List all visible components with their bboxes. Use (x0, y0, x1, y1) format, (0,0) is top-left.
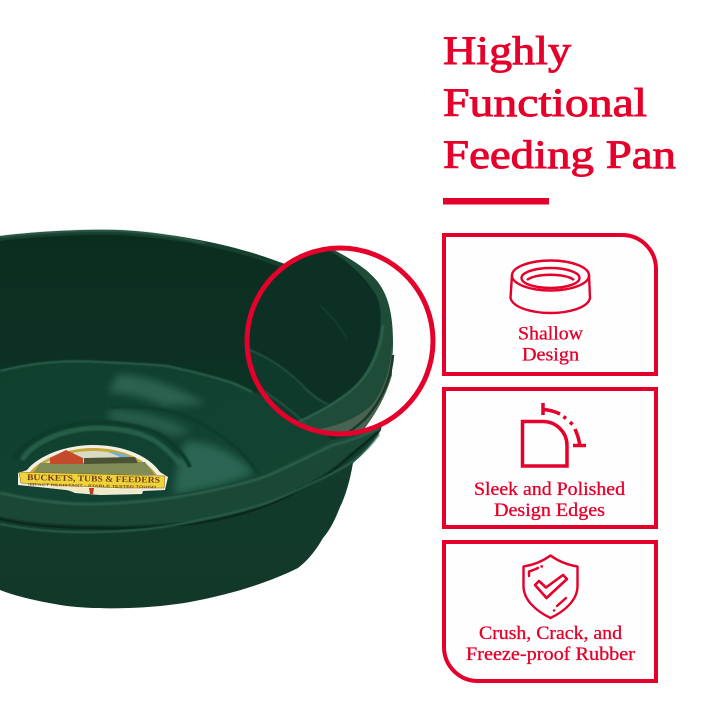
sticker banner text: BUCKETS, TUBS & FEEDERS (27, 472, 160, 485)
check mark (535, 575, 567, 598)
shield inner glint bottom (554, 598, 566, 610)
floor ridge highlight (0, 361, 252, 392)
label line 1: Shallow (518, 324, 583, 344)
label: sleek edges (474, 479, 626, 521)
title line 3: Feeding Pan (443, 132, 676, 177)
sticker dome (29, 448, 157, 475)
sticker trees (84, 457, 138, 464)
lens red ring (247, 248, 433, 434)
magnified floor (250, 352, 326, 420)
sticker label (18, 445, 168, 495)
magnified lower ridge (264, 390, 307, 425)
panel border (444, 389, 656, 527)
label line 1: Crush, Crack, and (479, 623, 623, 644)
panel: sleek edges (444, 389, 656, 527)
panel: shallow design (444, 235, 656, 374)
label line 1: Sleek and Polished (474, 479, 626, 500)
pan outer body (0, 230, 392, 608)
arc end cap top (541, 403, 545, 415)
magnified outer rim (298, 250, 393, 429)
sticker banner (19, 472, 165, 488)
title line 2: Functional (443, 80, 647, 125)
center well ridge (14, 422, 190, 467)
lens contents (250, 250, 394, 432)
floor sheen band 1 (108, 374, 206, 406)
magnified wall crease (320, 305, 347, 340)
title line 1: Highly (443, 28, 571, 73)
callout circle: magnified rim (240, 240, 433, 445)
label: crush proof (466, 623, 636, 665)
sticker sky (36, 451, 151, 472)
pan floor (0, 362, 333, 501)
shield outline (524, 556, 578, 618)
label line 2: Design (522, 344, 580, 366)
arc end cap bottom (573, 444, 586, 447)
sticker subtitle text: IMPACT RESISTANT · STABLE TESTED TOUGH (28, 483, 157, 489)
sticker barn (50, 450, 83, 464)
outer floor ring (110, 407, 257, 473)
rim top highlight (0, 231, 205, 243)
title underline (443, 198, 549, 204)
lower lip highlight (0, 434, 379, 532)
magnified dark lip (345, 355, 393, 435)
center well highlight (22, 428, 180, 464)
magnified rim light (298, 325, 383, 422)
corner arc (543, 410, 560, 414)
magnified floor ridge (248, 349, 328, 404)
shield inner glint top (529, 566, 542, 576)
floor sheen band 2 (108, 409, 192, 436)
panel border (444, 235, 656, 374)
product photo: green feeding pan (0, 230, 392, 608)
rim shadow line (0, 432, 378, 528)
sticker field (33, 462, 155, 475)
magnified interior (250, 251, 381, 412)
panel border (444, 542, 656, 681)
magnified rim band (320, 345, 392, 432)
rounded corner shape (522, 422, 567, 466)
interior wall (0, 235, 375, 501)
icon: rounded corner (522, 403, 586, 466)
label line 2: Freeze-proof Rubber (466, 644, 636, 665)
sticker logo (89, 488, 94, 494)
panel: crush proof (444, 542, 656, 681)
floor light well (174, 442, 254, 495)
label: shallow design (518, 324, 583, 366)
lens white background (247, 248, 433, 434)
pan rim band (0, 428, 381, 525)
label line 2: Design Edges (494, 500, 605, 521)
corner arc dashes (564, 416, 580, 444)
icon: shield with check (524, 556, 578, 618)
sticker white outline (18, 445, 168, 495)
title (443, 28, 676, 177)
sticker logo tab (48, 486, 142, 494)
sticker water (108, 452, 137, 461)
icon: shallow bowl (510, 260, 590, 313)
rim highlight edge (0, 428, 380, 504)
